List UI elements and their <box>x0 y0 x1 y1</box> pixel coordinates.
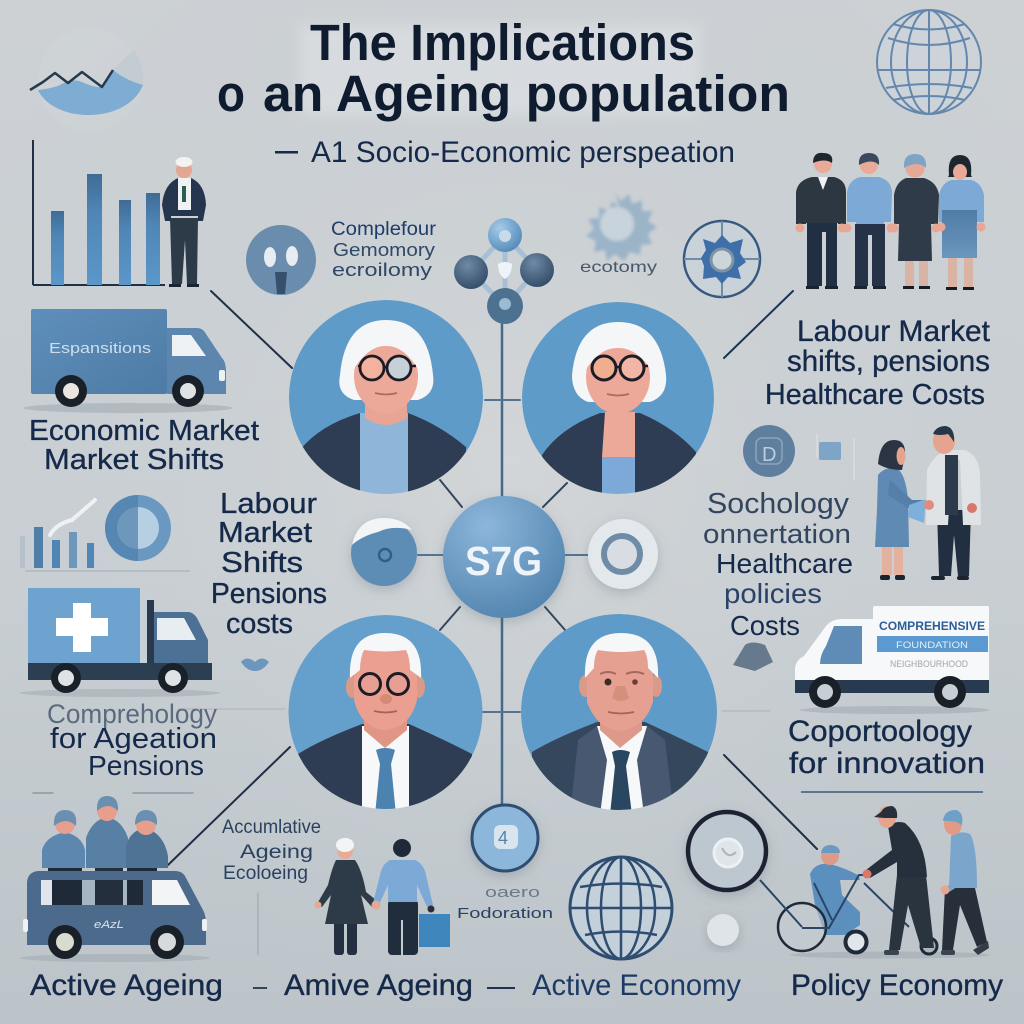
label: accumulative ageing ecoloeing: Ecoloeing <box>223 863 308 884</box>
label: federation: oaero <box>485 884 540 901</box>
label: comprehology for ageation pensions: for Ageation <box>50 723 217 755</box>
label: federation <box>457 884 553 922</box>
text: top-centre label <box>331 219 437 280</box>
wheelchair frame <box>760 875 937 954</box>
figures: older couple with bag <box>314 838 450 955</box>
icon: compass ring <box>684 221 760 297</box>
bottom labels <box>30 969 1003 1002</box>
hub node: left blue sphere <box>351 518 417 586</box>
label: federation: Fodoration <box>457 905 553 922</box>
label: labour market pensions healthcare: shifts, pensions <box>787 345 990 378</box>
label: comprehology for ageation pensions: Comprehology <box>47 699 217 729</box>
figures: group of four adults <box>796 153 986 290</box>
bottom labels: Active Ageing <box>30 969 223 1002</box>
portrait: older woman top right <box>522 302 714 500</box>
title: The Implications <box>310 14 695 71</box>
label: coportology for innovation: for innovation <box>789 747 985 780</box>
bottom labels: Amive Ageing <box>284 969 473 1002</box>
divider under innovation label <box>801 791 983 793</box>
shadow <box>20 954 210 962</box>
label: labour market pensions healthcare: Labour Market <box>797 315 991 348</box>
label: labour market pensions healthcare <box>765 315 991 411</box>
ground shadow <box>790 952 990 958</box>
truck: medical cross <box>20 588 220 697</box>
passengers <box>42 796 168 905</box>
icon: small blue tag <box>817 434 854 480</box>
label: accumulative ageing ecoloeing: Accumlative <box>222 817 321 838</box>
connector lines <box>33 291 817 955</box>
figure: doctor in white coat <box>924 426 981 580</box>
label: economic market shifts: Market Shifts <box>44 444 224 476</box>
truck: white comprehensive van: COMPREHENSIVE <box>879 619 985 633</box>
title <box>217 14 790 122</box>
icon: grey cap shape <box>733 642 773 671</box>
label: sochology healthcare policies costs: Healthcare <box>716 548 853 579</box>
figure: man in dark suit <box>796 153 846 289</box>
bottom connector badge: 4 <box>498 828 508 848</box>
label: sochology healthcare policies costs: policies <box>724 578 822 609</box>
truck: economic market: Espansitions <box>49 340 151 357</box>
bar chart with standing man <box>33 140 206 287</box>
portrait: older man bottom right <box>521 614 717 816</box>
central hub <box>443 496 565 618</box>
icon: bottom globe <box>570 857 672 959</box>
label: comprehology for ageation pensions <box>47 699 217 781</box>
icon: data badge <box>743 425 795 477</box>
hub node: right white ring <box>588 519 658 589</box>
figure: woman with paper <box>875 440 926 580</box>
portrait: older woman top left <box>289 300 483 500</box>
label: labour market shifts: Market <box>218 517 312 549</box>
label: labour market pensions healthcare: Healthcare Costs <box>765 379 985 411</box>
icon: small heart <box>241 658 269 671</box>
text: top-centre label: Complefour <box>331 219 437 240</box>
icon: blurred gear with label: ecotomy <box>580 259 657 276</box>
truck: white comprehensive van: NEIGHBOURHOOD <box>890 659 968 669</box>
label: labour market shifts: costs <box>226 608 293 640</box>
figure: man in blue shirt <box>372 839 434 955</box>
bottom labels: Active Economy <box>532 969 741 1002</box>
portrait: older man bottom left <box>288 615 482 816</box>
label: coportology for innovation: Coportoology <box>788 715 972 748</box>
label: labour market shifts: Shifts <box>221 547 303 579</box>
label: accumulative ageing ecoloeing <box>222 817 321 884</box>
central hub: S7G <box>465 538 542 584</box>
carer pushing wheelchair <box>862 806 934 955</box>
icon: top-right globe <box>877 10 981 114</box>
label: labour market shifts: Labour <box>220 488 317 520</box>
figure: woman in blue skirt <box>936 155 986 290</box>
truck: economic market <box>23 309 233 413</box>
bottom labels: Policy Economy <box>791 969 1003 1002</box>
label: sochology healthcare policies costs: Sochology <box>707 488 850 520</box>
figure: man in suit <box>162 157 206 287</box>
truck: white comprehensive van <box>795 606 990 714</box>
text: top-centre label: Gemomory <box>333 240 435 260</box>
mini chart with donut <box>20 495 190 571</box>
text: top-centre label: ecroilomy <box>332 260 432 280</box>
label: labour market shifts <box>211 488 327 640</box>
icon: white pebble <box>707 914 739 946</box>
icon: blurred gear with label <box>580 193 657 276</box>
label: economic market shifts <box>29 415 259 476</box>
label: economic market shifts: Economic Market <box>29 415 259 447</box>
mini bars <box>20 527 94 568</box>
title: an Ageing population <box>263 65 790 122</box>
figures: patient and doctor <box>875 426 981 580</box>
subtitle: A1 Socio-Economic perspeation <box>311 136 735 169</box>
label: coportology for innovation <box>788 715 985 780</box>
figure: older woman <box>314 838 376 955</box>
seated person <box>810 845 860 935</box>
figure: person in blue sweater <box>842 153 896 289</box>
walking older person <box>940 810 989 955</box>
icon: wave chart badge <box>30 28 143 132</box>
figures: wheelchair scene <box>760 806 990 958</box>
figure: woman in dark dress <box>890 154 940 289</box>
bottom connector badge <box>472 805 538 871</box>
label: sochology healthcare policies costs: onnertation <box>703 519 851 549</box>
truck with three passengers <box>20 796 210 962</box>
label: sochology healthcare policies costs: Costs <box>730 610 800 641</box>
label: accumulative ageing ecoloeing: Ageing <box>240 842 313 863</box>
icon: data badge: D <box>762 444 776 466</box>
icon: molecule network <box>454 218 554 324</box>
truck body <box>27 871 206 945</box>
shopping bag <box>419 914 450 947</box>
icon: magnifier ring <box>688 812 766 890</box>
donut <box>105 495 171 561</box>
truck: white comprehensive van: FOUNDATION <box>896 640 968 650</box>
label: sochology healthcare policies costs <box>703 488 853 641</box>
truck with three passengers: eAzL <box>94 919 124 931</box>
title: o <box>217 65 245 122</box>
label: labour market shifts: Pensions <box>211 578 327 610</box>
chart bars <box>51 174 160 285</box>
icon: lightbulb badge <box>246 225 316 295</box>
chart axes <box>33 140 165 285</box>
label: comprehology for ageation pensions: Pensions <box>88 750 204 781</box>
